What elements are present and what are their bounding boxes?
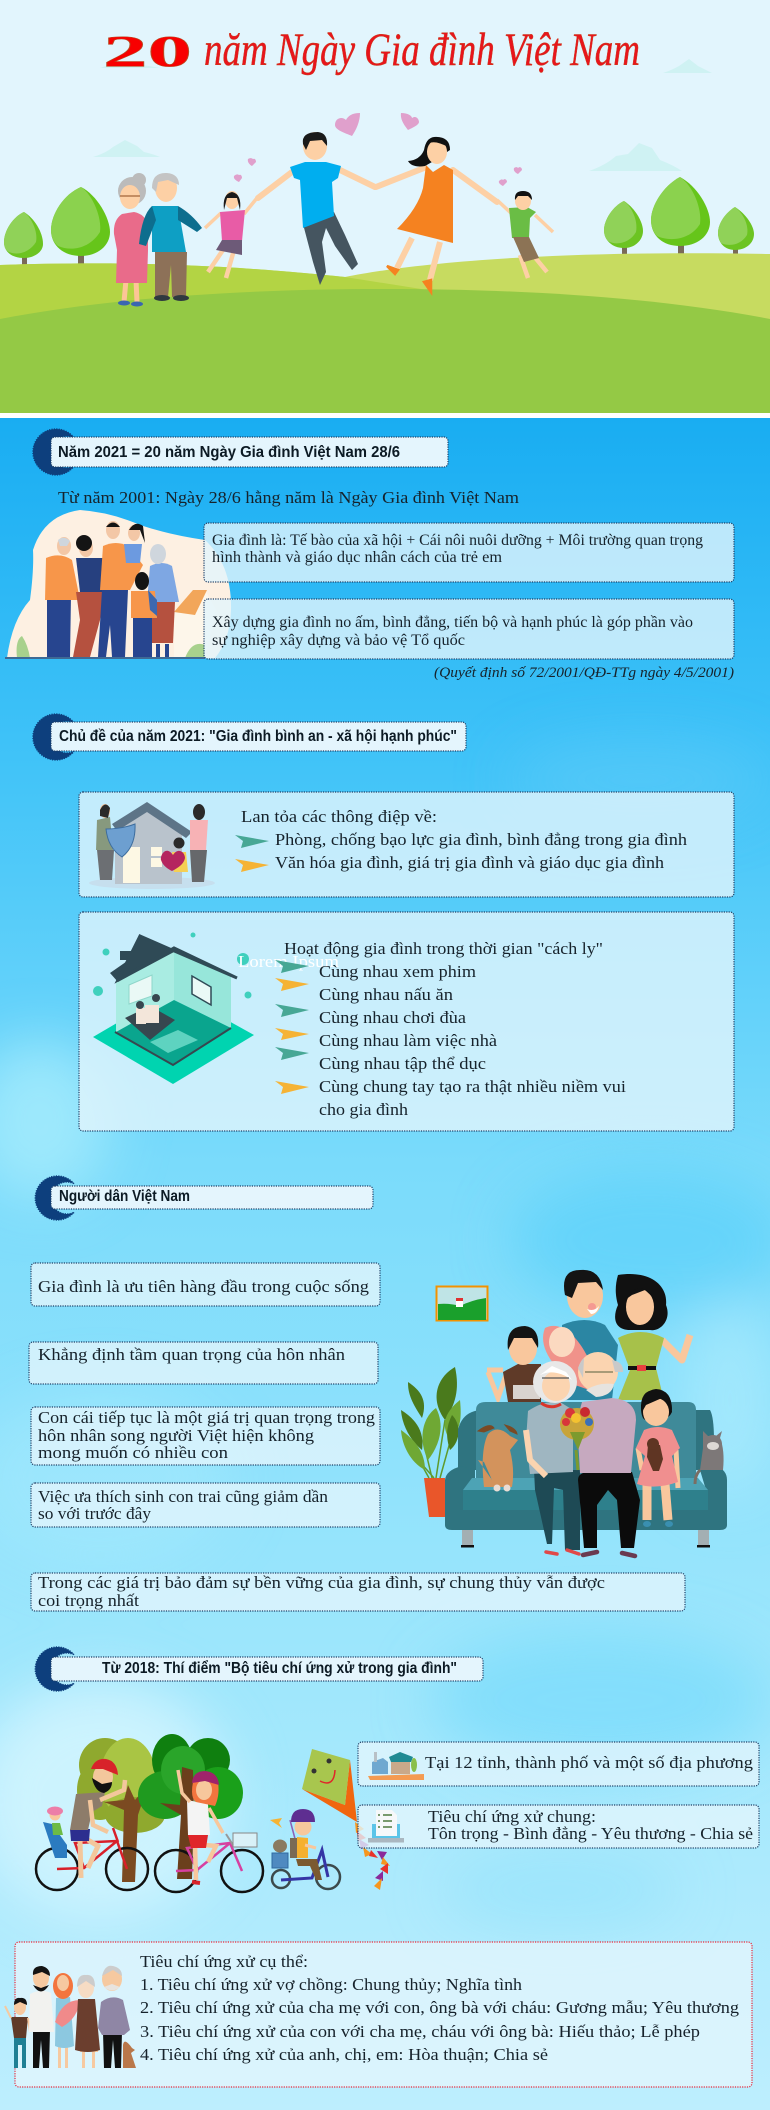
boy figure [131, 572, 157, 657]
mother [615, 1274, 690, 1400]
box: children: mong muốn có nhiều con [38, 1443, 229, 1462]
child's bicycle [270, 1818, 340, 1889]
info box: building families [204, 599, 734, 659]
flowers [560, 1407, 594, 1470]
mother [376, 137, 497, 292]
illustration: family on sofa [401, 1270, 727, 1556]
girl [636, 1389, 680, 1527]
box: priority [31, 1263, 380, 1306]
activity list: Cùng nhau tập thể dục [319, 1054, 486, 1073]
boy [487, 1326, 541, 1402]
illustration: family and house [5, 510, 231, 658]
mother rider [178, 1770, 223, 1883]
activity list: Cùng nhau chơi đùa [319, 1008, 466, 1027]
section 4 heading: Từ 2018: Thí điểm "Bộ tiêu chí ứng xử trong gia đình" [102, 1660, 457, 1677]
panel: quarantine activities: Hoạt động gia đình trong thời gian "cách ly" [284, 939, 603, 958]
dog [478, 1425, 518, 1492]
section 2 heading: Chủ đề của năm 2021: "Gia đình bình an - xã hội hạnh phúc" [59, 728, 457, 745]
grandmother figure [147, 544, 179, 657]
panel: specific criteria: 2. Tiêu chí ứng xử của cha mẹ với con, ông bà với cháu: Gương mẫu; Yêu thương [140, 1998, 740, 2017]
intro line: Từ năm 2001: Ngày 28/6 hằng năm là Ngày Gia đình Việt Nam [58, 488, 519, 507]
box: general criteria [358, 1805, 759, 1848]
box: localities: Tại 12 tỉnh, thành phố và một số địa phương [425, 1753, 754, 1772]
cloud behind number [100, 64, 160, 68]
box: localities [358, 1742, 759, 1786]
box: fidelity: coi trọng nhất [38, 1591, 139, 1610]
woman and baby [53, 1973, 80, 2068]
activity list: Cùng nhau xem phim [319, 962, 476, 981]
citation: (Quyết định số 72/2001/QĐ-TTg ngày 4/5/2001) [434, 665, 734, 681]
panel: specific criteria: Tiêu chí ứng xử cụ thể: [140, 1952, 308, 1971]
father [562, 1270, 618, 1400]
panel: messages: Phòng, chống bạo lực gia đình, bình đẳng trong gia đình [275, 830, 688, 849]
title: 20 [103, 27, 192, 76]
cloud right [589, 143, 682, 171]
sofa [445, 1402, 727, 1548]
ghost caption: Lorem Ipsum [238, 952, 339, 971]
info box: building families: sự nghiệp xây dựng và bảo vệ Tổ quốc [212, 632, 465, 649]
title [103, 24, 640, 76]
grandpa [139, 173, 202, 301]
man [29, 1966, 54, 2068]
trees [77, 1734, 243, 1882]
girl [205, 191, 257, 278]
illustration: family cycling [36, 1734, 390, 1892]
panel: quarantine activities [79, 912, 734, 1131]
hero sky [0, 0, 770, 413]
hearts [234, 113, 522, 186]
info box: definition [204, 523, 734, 582]
icon: house with family [89, 802, 215, 889]
grandmother [526, 1361, 580, 1554]
woman figure [73, 535, 105, 657]
hero family [114, 132, 553, 306]
box: priority: Gia đình là ưu tiên hàng đầu trong cuộc sống [38, 1277, 370, 1296]
activity list: Cùng chung tay tạo ra thật nhiều niềm vui [319, 1077, 626, 1096]
illustration: family group [5, 1966, 136, 2068]
activity list [319, 962, 626, 1119]
box: fidelity [31, 1573, 685, 1611]
cloud top right [663, 59, 712, 73]
dog [123, 2042, 136, 2068]
section 3 heading: Người dân Việt Nam [59, 1188, 190, 1205]
trees left [4, 187, 110, 265]
icon: isometric house [93, 932, 254, 1084]
cat [695, 1431, 724, 1484]
section 1 heading: Năm 2021 = 20 năm Ngày Gia đình Việt Nam 28/6 [58, 444, 400, 461]
info box: building families: Xây dựng gia đình no ấm, bình đẳng, tiến bộ và hạnh phúc là góp phần vào [212, 614, 693, 631]
panel: specific criteria: 3. Tiêu chí ứng xử của con với cha mẹ, cháu với ông bà: Hiếu thảo; Lễ phép [140, 2022, 700, 2041]
icon: paper plane yellow [235, 859, 269, 872]
hills [0, 253, 770, 340]
icon: buildings [368, 1752, 424, 1780]
child rider [290, 1809, 322, 1880]
man and child figure [98, 521, 145, 657]
father [258, 132, 375, 285]
activity list: Cùng nhau làm việc nhà [319, 1031, 497, 1050]
title: năm Ngày Gia đình Việt Nam [204, 24, 640, 76]
box: marriage [29, 1342, 378, 1384]
box: son preference [31, 1483, 380, 1527]
panel: specific criteria: 1. Tiêu chí ứng xử vợ chồng: Chung thủy; Nghĩa tình [140, 1975, 523, 1994]
father rider [43, 1759, 125, 1878]
section 2 heading [33, 714, 466, 760]
plant [401, 1367, 461, 1517]
activity list: Cùng nhau nấu ăn [319, 985, 454, 1004]
box: son preference: Việc ưa thích sinh con trai cũng giảm dần [38, 1487, 328, 1506]
boy [497, 191, 553, 278]
box: general criteria: Tiêu chí ứng xử chung: [428, 1807, 596, 1826]
bicycle 2 [155, 1833, 263, 1892]
panel: specific criteria [5, 1942, 752, 2087]
box: fidelity: Trong các giá trị bảo đảm sự bền vững của gia đình, sự chung thủy vẫn được [38, 1573, 605, 1592]
section 4 heading [35, 1647, 483, 1691]
boy [5, 1998, 30, 2068]
grandma [114, 173, 148, 306]
box: son preference: so với trước đây [38, 1504, 152, 1523]
grandfather figure [45, 537, 80, 657]
info box: definition: hình thành và giáo dục nhân cách của trẻ em [212, 549, 502, 566]
bicycle 1 [36, 1828, 148, 1890]
grandfather [577, 1352, 640, 1556]
box: marriage: Khẳng định tầm quan trọng của hôn nhân [38, 1345, 346, 1364]
grandmother [75, 1975, 100, 2068]
panel: messages: Lan tỏa các thông điệp về: [241, 807, 437, 826]
section 1 heading [33, 429, 448, 475]
box: general criteria: Tôn trọng - Bình đẳng - Yêu thương - Chia sẻ [428, 1824, 753, 1843]
box: children: hôn nhân song người Việt hiện không [38, 1426, 315, 1445]
baby [543, 1326, 595, 1392]
activity list: cho gia đình [319, 1100, 409, 1119]
grandfather [98, 1966, 130, 2068]
cloud left [93, 140, 160, 157]
icon: paper plane green [235, 835, 269, 848]
icons: paper planes [275, 960, 309, 1094]
hero landscape [0, 59, 770, 413]
icon: checklist [368, 1810, 404, 1842]
panel: messages: Văn hóa gia đình, giá trị gia đình và giáo dục gia đình [275, 853, 665, 872]
panel: messages [79, 792, 734, 897]
box: children [31, 1407, 380, 1465]
kite [302, 1749, 390, 1890]
panel: specific criteria: 4. Tiêu chí ứng xử của anh, chị, em: Hòa thuận; Chia sẻ [140, 2045, 548, 2064]
info box: definition: Gia đình là: Tế bào của xã hội + Cái nôi nuôi dưỡng + Môi trường quan trọng [212, 532, 703, 549]
picture frame [436, 1286, 488, 1320]
box: children: Con cái tiếp tục là một giá trị quan trọng trong [38, 1408, 376, 1427]
section 3 heading [35, 1176, 373, 1220]
trees right [604, 177, 754, 256]
